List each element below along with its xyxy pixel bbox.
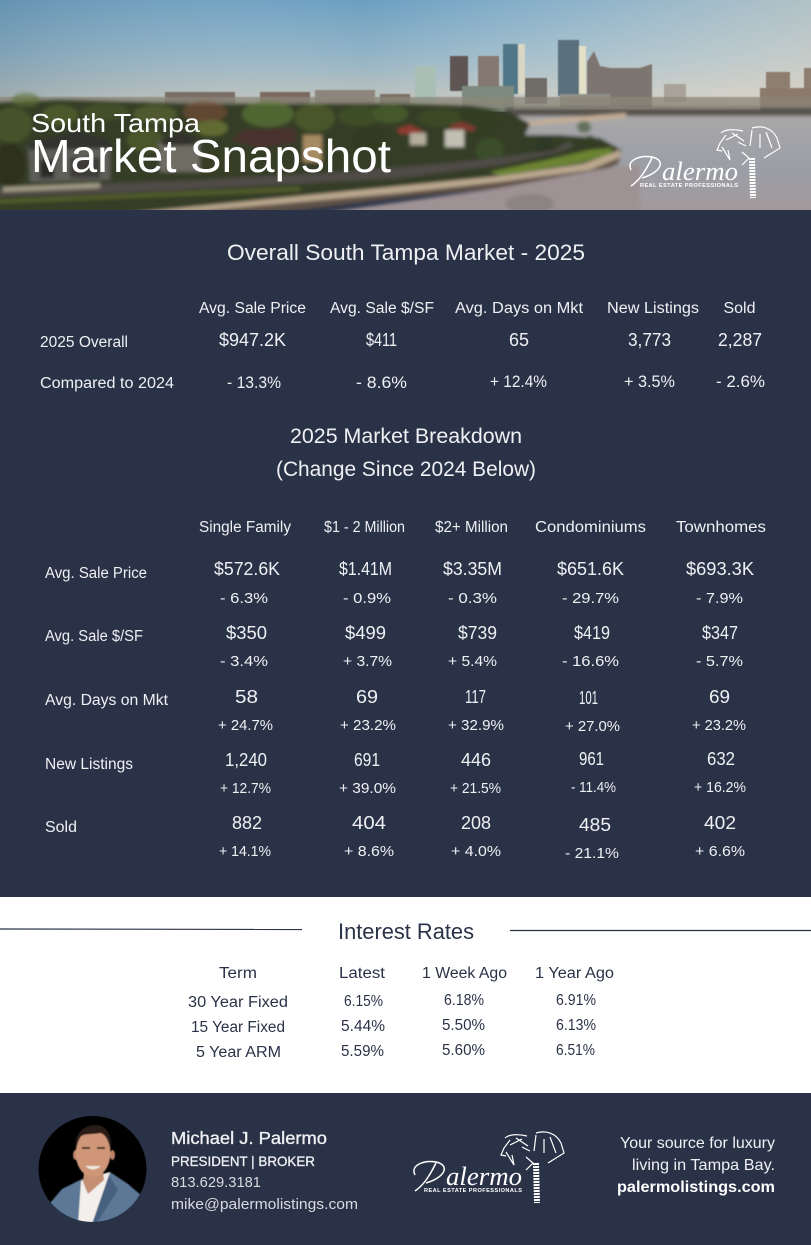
rates table header: Term — [219, 965, 257, 982]
breakdown column headers: Condominiums — [535, 519, 646, 536]
row: sold: 404 — [352, 813, 386, 833]
rate row: 15 year fixed: 15 Year Fixed — [191, 1019, 285, 1036]
row: avg sale price: - 29.7% — [562, 590, 619, 607]
row: sold: 882 — [232, 813, 262, 833]
heading: 2025 Market Breakdown: (Change Since 2024 Below) — [276, 458, 536, 481]
row: avg sale per square foot: Avg. Sale $/SF — [45, 628, 143, 645]
row: new listings: - 11.4% — [571, 779, 616, 796]
row: avg sale per square foot: - 5.7% — [696, 653, 743, 670]
rate row: 30 year fixed: 6.15% — [344, 993, 383, 1010]
row: new listings: 1,240 — [225, 750, 267, 770]
logo: Palermo Real Estate Professionals (header) — [630, 127, 780, 198]
text block: tagline and website: living in Tampa Bay. — [632, 1157, 775, 1174]
breakdown column headers: Townhomes — [676, 519, 766, 536]
row: avg sale price: - 6.3% — [220, 590, 268, 607]
row: 2025 overall — [40, 330, 762, 351]
row: compared to 2024: - 2.6% — [716, 372, 765, 391]
rates table header — [219, 965, 614, 982]
row: avg sale per square foot: $419 — [574, 623, 610, 643]
row: sold — [45, 813, 745, 862]
row: avg sale per square foot: - 3.4% — [220, 653, 268, 670]
row: avg days on market: + 32.9% — [448, 717, 504, 734]
rate row: 30 year fixed: 6.91% — [556, 992, 596, 1009]
row: avg sale price: - 7.9% — [696, 590, 743, 607]
row: new listings: + 21.5% — [450, 780, 501, 797]
rate row: 30 year fixed — [188, 992, 596, 1011]
rate row: 15 year fixed: 5.44% — [341, 1018, 385, 1035]
row: new listings: + 39.0% — [339, 780, 396, 797]
heading: interest rates: Interest Rates — [338, 919, 474, 944]
breakdown column headers: $1 - 2 Million — [324, 519, 405, 536]
text block: tagline and website: palermolistings.com — [617, 1179, 775, 1196]
photo: Michael J. Palermo headshot — [38, 1116, 146, 1222]
row: new listings: + 12.7% — [220, 780, 271, 797]
logo: Palermo Real Estate Professionals (footer): REAL ESTATE PROFESSIONALS — [424, 1188, 522, 1194]
overall column headers: Avg. Sale $/SF — [330, 300, 434, 317]
row: sold: + 6.6% — [695, 843, 745, 860]
text block: agent contact: PRESIDENT | BROKER — [171, 1153, 315, 1169]
logo: Palermo Real Estate Professionals (header): alermo — [662, 157, 738, 186]
row: new listings: 446 — [461, 750, 491, 770]
overall column headers: Avg. Days on Mkt — [455, 300, 584, 317]
row: sold: 208 — [461, 813, 491, 833]
row: sold: Sold — [45, 819, 77, 836]
text block: agent contact: Michael J. Palermo — [171, 1128, 327, 1148]
rates table header: Latest — [339, 965, 386, 982]
row: new listings: 961 — [579, 749, 604, 769]
road and grass — [0, 141, 574, 197]
row: compared to 2024 — [40, 372, 765, 392]
row: avg sale price: Avg. Sale Price — [45, 565, 147, 582]
row: avg days on market: + 24.7% — [218, 717, 273, 734]
text block: tagline and website: Your source for luxury — [620, 1135, 775, 1152]
row: avg days on market: + 23.2% — [340, 717, 396, 734]
row: compared to 2024: - 8.6% — [356, 373, 407, 392]
row: sold: - 21.1% — [565, 845, 619, 862]
row: avg sale price — [45, 559, 754, 607]
row: avg days on market: 58 — [235, 687, 258, 707]
row: avg sale per square foot: $739 — [458, 623, 497, 643]
row: 2025 overall: 2,287 — [718, 330, 762, 350]
row: avg sale per square foot — [45, 623, 743, 670]
row: avg sale price: $3.35M — [443, 559, 502, 579]
row: new listings: New Listings — [45, 756, 133, 773]
breakdown column headers: $2+ Million — [435, 519, 508, 536]
row: 2025 overall: 2025 Overall — [40, 334, 128, 351]
row: avg days on market: Avg. Days on Mkt — [45, 692, 169, 709]
logo: Palermo Real Estate Professionals (footer) — [414, 1132, 564, 1203]
table: market breakdown — [45, 519, 766, 862]
row: avg sale per square foot: $499 — [345, 623, 386, 643]
panel: interest rates — [0, 897, 811, 1093]
row: 2025 overall: 3,773 — [628, 330, 671, 350]
rate row: 30 year fixed: 6.18% — [444, 992, 484, 1009]
row: avg sale price: - 0.9% — [343, 590, 391, 607]
row: 2025 overall: $947.2K — [219, 330, 286, 350]
row: avg days on market: 117 — [465, 687, 486, 707]
row: 2025 overall: $411 — [366, 330, 397, 350]
logo: Palermo Real Estate Professionals (header): REAL ESTATE PROFESSIONALS — [640, 183, 738, 189]
houses — [28, 122, 476, 182]
row: new listings — [45, 749, 746, 797]
breakdown column headers — [199, 519, 766, 536]
row: sold: + 8.6% — [344, 843, 394, 860]
row: avg sale price: $651.6K — [557, 559, 624, 579]
rate row: 15 year fixed — [191, 1017, 596, 1036]
row: avg sale price: $693.3K — [686, 559, 754, 579]
rate row: 5 year ARM: 5.59% — [341, 1043, 384, 1060]
row: avg sale per square foot: - 16.6% — [562, 653, 619, 670]
text block: tagline and website — [617, 1135, 775, 1196]
rate row: 5 year ARM — [196, 1042, 595, 1061]
title: South Tampa Market Snapshot: Market Snapshot — [31, 130, 391, 182]
tree canopy highlights — [0, 93, 596, 187]
overall column headers — [199, 300, 756, 317]
row: avg days on market: + 23.2% — [692, 717, 746, 734]
title: South Tampa Market Snapshot: South Tampa — [31, 108, 201, 138]
text block: agent contact: 813.629.3181 — [171, 1174, 261, 1191]
rates table header: 1 Week Ago — [422, 965, 507, 982]
row: sold: + 4.0% — [451, 843, 501, 860]
rate row: 15 year fixed: 5.50% — [442, 1017, 485, 1034]
table: overall market — [40, 300, 765, 392]
breakdown column headers: Single Family — [199, 519, 291, 536]
heading: 2025 Market Breakdown — [276, 425, 536, 481]
row: avg sale per square foot: + 3.7% — [343, 653, 392, 670]
row: compared to 2024: + 12.4% — [490, 372, 547, 391]
row: sold: 402 — [704, 813, 736, 833]
rate row: 30 year fixed: 30 Year Fixed — [188, 994, 288, 1011]
row: avg sale price: $1.41M — [339, 559, 392, 579]
row: avg days on market: 101 — [579, 688, 598, 708]
row: avg sale per square foot: $350 — [226, 623, 267, 643]
rate row: 5 year ARM: 5.60% — [442, 1042, 485, 1059]
overall column headers: New Listings — [607, 300, 699, 317]
row: compared to 2024: + 3.5% — [624, 372, 675, 391]
logo: Palermo Real Estate Professionals (footer): alermo — [446, 1162, 522, 1191]
row: new listings: 632 — [707, 749, 735, 769]
rate row: 15 year fixed: 6.13% — [556, 1017, 596, 1034]
row: new listings: + 16.2% — [694, 779, 746, 796]
heading: Overall South Tampa Market 2025: Overall South Tampa Market - 2025 — [227, 240, 585, 265]
row: compared to 2024: Compared to 2024 — [40, 375, 174, 392]
header photo: Tampa skyline and bayshore — [0, 0, 811, 218]
row: avg days on market: 69 — [709, 687, 730, 707]
row: 2025 overall: 65 — [509, 330, 529, 350]
water reflection — [326, 166, 640, 210]
overall column headers: Avg. Sale Price — [199, 300, 306, 317]
row: avg days on market: 69 — [356, 687, 378, 707]
rate row: 5 year ARM: 6.51% — [556, 1042, 595, 1059]
seawall — [120, 149, 621, 216]
heading: 2025 Market Breakdown: 2025 Market Breakdown — [290, 425, 522, 448]
row: avg days on market: + 27.0% — [565, 718, 620, 735]
row: avg sale price: $572.6K — [214, 559, 280, 579]
title: South Tampa Market Snapshot — [31, 108, 391, 182]
row: sold: 485 — [579, 815, 611, 835]
row: sold: + 14.1% — [219, 843, 271, 860]
row: avg days on market — [45, 687, 746, 735]
row: avg sale per square foot: + 5.4% — [448, 653, 497, 670]
text block: agent contact: mike@palermolistings.com — [171, 1196, 358, 1213]
text block: agent contact — [171, 1128, 358, 1213]
overall column headers: Sold — [724, 300, 756, 317]
row: avg sale price: - 0.3% — [448, 590, 497, 607]
rate row: 5 year ARM: 5 Year ARM — [196, 1044, 281, 1061]
row: compared to 2024: - 13.3% — [227, 373, 281, 392]
row: avg sale per square foot: $347 — [702, 623, 738, 643]
rates table header: 1 Year Ago — [535, 965, 614, 982]
row: new listings: 691 — [354, 750, 380, 770]
